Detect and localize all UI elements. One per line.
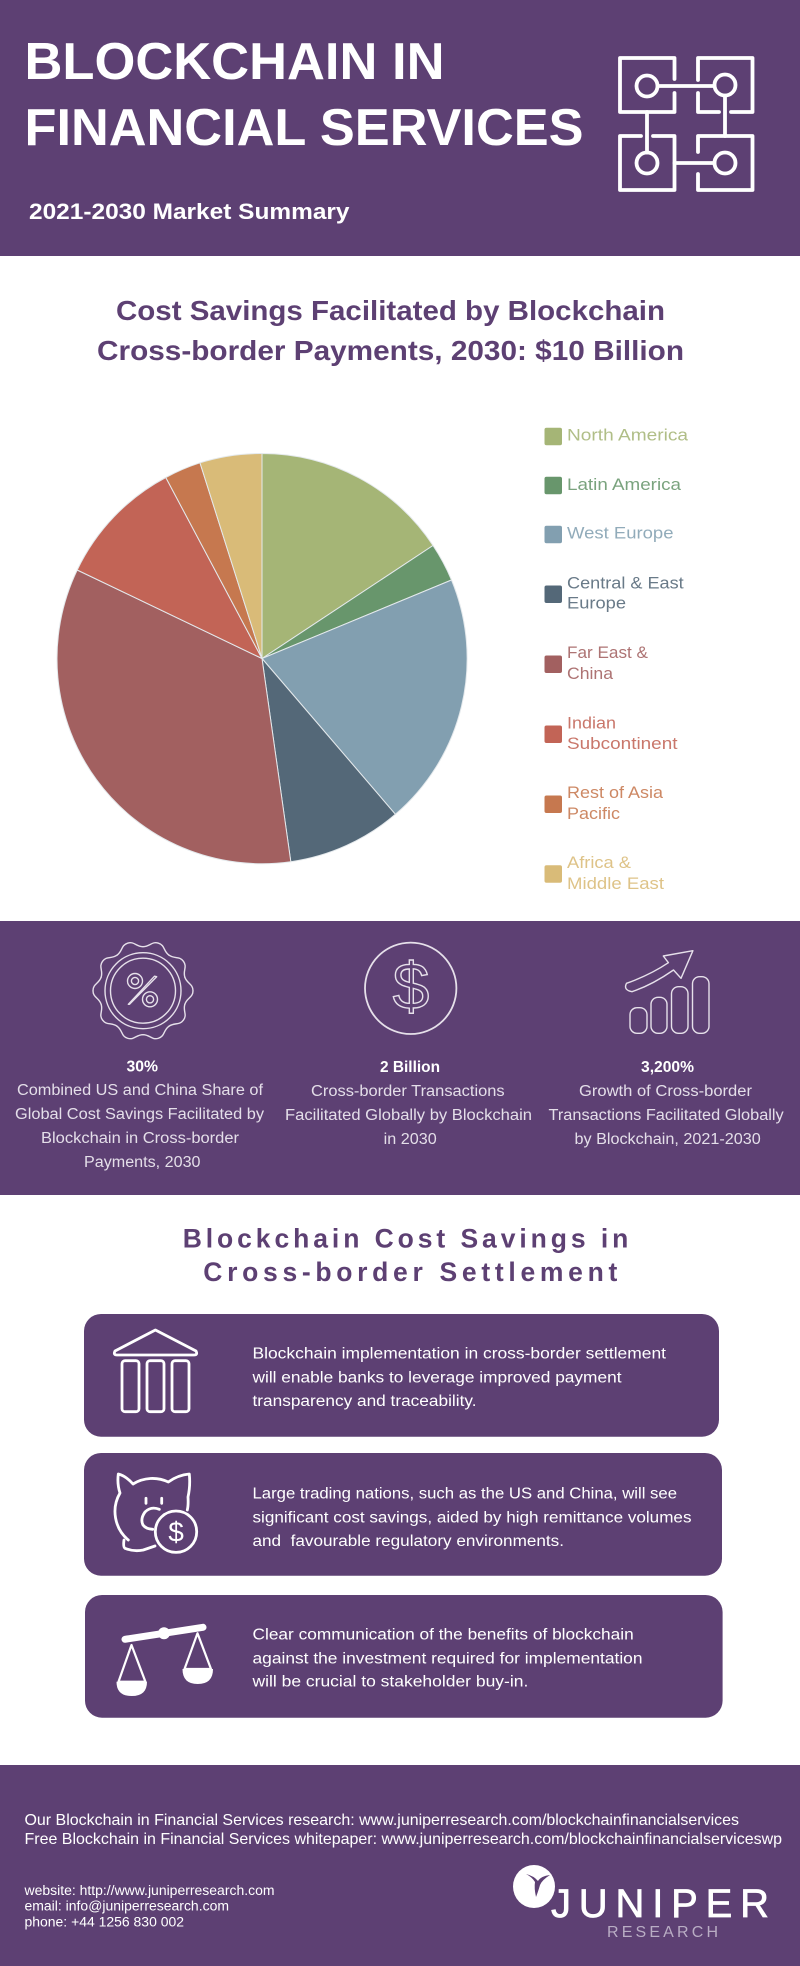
legend item: Africa and Middle East: Africa &: [567, 853, 632, 872]
legend item: Africa and Middle East: Middle East: [567, 874, 664, 893]
title: BLOCKCHAIN IN: [24, 33, 444, 91]
statistic: 2 billion: Cross-border Transactions: [311, 1083, 505, 1100]
heading: pie chart title: [97, 295, 684, 366]
legend item: Latin America: Latin America: [567, 475, 682, 494]
statistic: 3,200 percent: [548, 1059, 784, 1148]
card 3 text: will be crucial to stakeholder buy-in.: [251, 1674, 528, 1691]
pie chart: [57, 453, 467, 864]
card 1 text: [251, 1345, 667, 1410]
legend item: North America: North America: [567, 426, 689, 445]
legend item: Central and East Europe: [544, 573, 684, 612]
card 1 text: Blockchain implementation in cross-border settlement: [252, 1345, 667, 1362]
logo: Juniper Research: JUNIPER: [551, 1882, 769, 1926]
card 2 text: and favourable regulatory environments.: [252, 1533, 564, 1550]
legend item: Far East and China: Far East &: [567, 643, 649, 662]
contact details: [23, 1883, 274, 1930]
legend item: Far East and China: [544, 643, 649, 683]
statistic: 3,200 percent: by Blockchain, 2021-2030: [574, 1131, 761, 1148]
research links: [24, 1812, 782, 1848]
statistic: 30 percent: 30%: [126, 1059, 158, 1076]
panel: card 1 bank: [84, 1314, 719, 1437]
title: [24, 33, 584, 157]
card 2 text: Large trading nations, such as the US and China, will see: [252, 1485, 677, 1502]
legend: [544, 426, 689, 893]
legend item: Central and East Europe: Europe: [567, 593, 626, 612]
icon: piggy bank with coin: [115, 1474, 197, 1552]
heading: settlement section: [183, 1224, 628, 1287]
panel: key statistics: [0, 921, 800, 1195]
legend item: Indian Subcontinent: Indian: [567, 713, 616, 732]
research links: Free Blockchain in Financial Services whitepaper: www.juniperresearch.com/blockchainfinancialserviceswp: [24, 1831, 782, 1848]
statistic: 30 percent: Payments, 2030: [84, 1154, 201, 1171]
icon: growth bars and arrow: [626, 951, 709, 1033]
logo: Juniper Research: RESEARCH: [607, 1924, 718, 1941]
statistic: 3,200 percent: Transactions Facilitated Globally: [548, 1107, 784, 1124]
legend item: Central and East Europe: Central & East: [567, 573, 684, 592]
icon: dollar coin: $: [393, 949, 429, 1023]
heading: settlement section: Cross-border Settlement: [203, 1257, 617, 1287]
card 3 text: [251, 1626, 642, 1691]
panel: header: [0, 0, 800, 256]
contact details: website: http://www.juniperresearch.com: [23, 1883, 274, 1898]
card 2 text: [252, 1485, 692, 1550]
legend item: West Europe: West Europe: [567, 524, 674, 543]
statistic: 2 billion: Facilitated Globally by Blockchain: [285, 1107, 532, 1124]
card 1 text: will enable banks to leverage improved payment: [251, 1369, 622, 1386]
card 3 text: Clear communication of the benefits of blockchain: [252, 1626, 634, 1643]
legend item: Rest of Asia Pacific: Pacific: [567, 804, 621, 823]
card 3 text: against the investment required for implementation: [252, 1650, 642, 1667]
panel: card 3 scales: [85, 1595, 723, 1718]
icon: percent badge: [89, 937, 197, 1045]
research links: Our Blockchain in Financial Services research: www.juniperresearch.com/blockchainfinancialservices: [24, 1812, 739, 1829]
legend item: Indian Subcontinent: Subcontinent: [567, 734, 678, 753]
panel: card 2 piggy bank: [84, 1453, 722, 1576]
icon: bank building: [114, 1330, 197, 1412]
legend item: Rest of Asia Pacific: [544, 783, 664, 823]
icon: blockchain network: [620, 58, 752, 190]
statistic: 30 percent: Combined US and China Share of: [17, 1082, 264, 1099]
statistic: 2 billion: [285, 1059, 532, 1148]
contact details: email: info@juniperresearch.com: [24, 1899, 229, 1914]
statistic: 30 percent: Global Cost Savings Facilitated by: [15, 1106, 264, 1123]
statistic: 2 billion: in 2030: [384, 1131, 437, 1148]
title: FINANCIAL SERVICES: [24, 99, 584, 157]
card 2 text: significant cost savings, aided by high remittance volumes: [252, 1509, 692, 1526]
icon: dollar coin: [365, 943, 456, 1034]
statistic: 30 percent: [15, 1059, 264, 1171]
legend item: Rest of Asia Pacific: Rest of Asia: [567, 783, 664, 802]
heading: settlement section: Blockchain Cost Savings in: [183, 1224, 628, 1254]
statistic: 30 percent: Blockchain in Cross-border: [41, 1130, 239, 1147]
card 1 text: transparency and traceability.: [252, 1393, 476, 1410]
heading: pie chart title: Cost Savings Facilitated by Blockchain: [116, 295, 665, 326]
panel: footer: [0, 1765, 800, 1966]
heading: pie chart title: Cross-border Payments, 2030: $10 Billion: [97, 335, 684, 366]
legend item: Africa and Middle East: [544, 853, 664, 893]
legend item: Far East and China: China: [567, 664, 614, 683]
contact details: phone: +44 1256 830 002: [24, 1915, 184, 1930]
statistic: 3,200 percent: Growth of Cross-border: [579, 1083, 752, 1100]
statistic: 3,200 percent: 3,200%: [641, 1059, 694, 1076]
icon: balance scales: [116, 1627, 213, 1696]
icon: piggy bank with coin: $: [168, 1516, 184, 1548]
legend item: Indian Subcontinent: [544, 713, 678, 753]
subtitle: 2021-2030 Market Summary: [29, 199, 350, 224]
logo: Juniper Research: [513, 1865, 769, 1941]
statistic: 2 billion: 2 Billion: [380, 1059, 440, 1076]
